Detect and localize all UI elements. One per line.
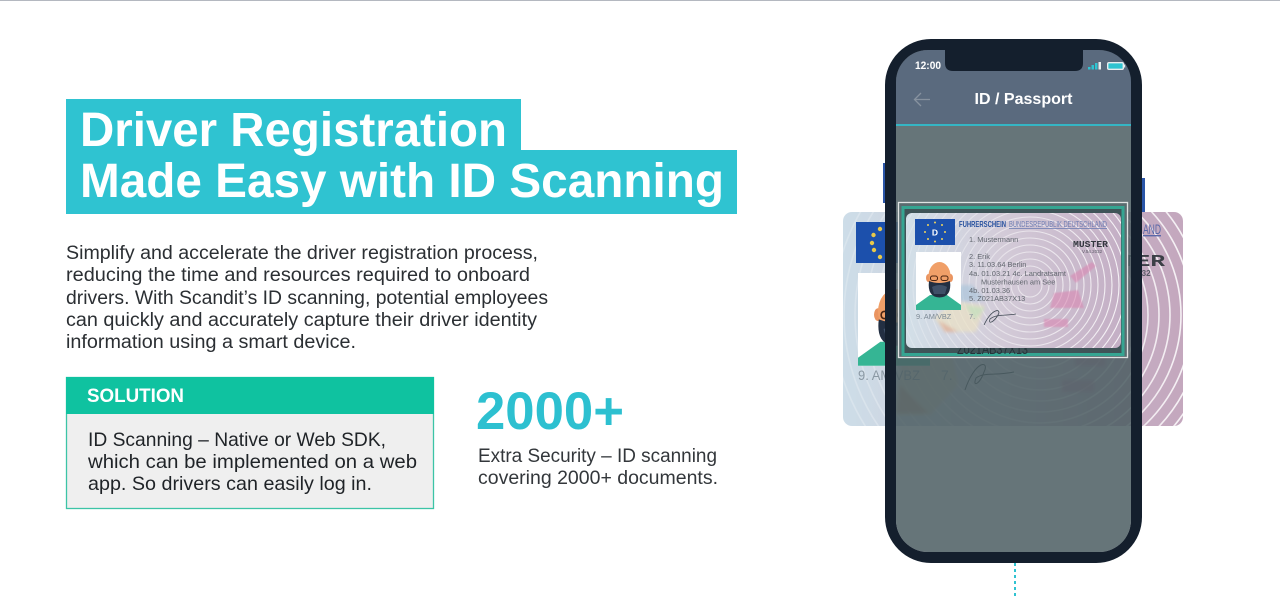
stat caption <box>478 446 718 489</box>
card heading <box>959 220 1107 229</box>
card fields: 7. <box>969 312 975 321</box>
back card licence category: 9. AM/VBZ <box>858 367 920 383</box>
stat caption: covering 2000+ documents. <box>478 468 718 489</box>
card heading: FUHRERSCHEIN <box>959 220 1006 229</box>
back card flag <box>856 222 916 263</box>
card fields: Musterhausen am See <box>981 278 1055 286</box>
icon: signal <box>1088 62 1101 70</box>
back card hologram <box>893 340 958 415</box>
card flag: D <box>932 228 938 238</box>
solution text: ID Scanning – Native or Web SDK, <box>88 429 386 451</box>
card flag <box>915 219 955 245</box>
solution text: app. So drivers can easily log in. <box>88 473 372 495</box>
card pink marks <box>1044 262 1096 327</box>
back card photo <box>858 273 930 366</box>
card fields: 5. Z021AB37X13 <box>969 294 1025 303</box>
guilloche pattern <box>906 213 1121 348</box>
intro paragraph: drivers. With Scandit’s ID scanning, potential employees <box>66 288 548 309</box>
front ID card <box>906 213 1121 348</box>
scan frame <box>898 202 1128 358</box>
solution text <box>87 429 417 495</box>
solution heading: SOLUTION <box>87 386 184 407</box>
stat: 2000+ <box>476 382 718 489</box>
notch <box>945 49 1083 71</box>
title banner: Driver Registration <box>80 104 507 157</box>
back card specimen stamp: MUSTER <box>1077 253 1166 272</box>
back card stamp date: .932 <box>1135 269 1151 278</box>
back ID card <box>843 212 1183 426</box>
icon: battery <box>1108 63 1125 69</box>
intro paragraph: can quickly and accurately capture their driver identity <box>66 310 538 331</box>
blue edges behind phone <box>883 163 1145 247</box>
phone body <box>885 39 1142 563</box>
screen title: ID / Passport <box>974 91 1073 108</box>
app header <box>896 50 1131 124</box>
solution header <box>66 377 434 414</box>
intro paragraph: reducing the time and resources required to onboard <box>66 265 530 286</box>
intro paragraph: information using a smart device. <box>66 332 356 353</box>
title banner <box>66 99 737 214</box>
icon: back arrow <box>914 93 930 106</box>
phone <box>885 39 1142 563</box>
back card pink marks <box>1062 356 1105 392</box>
top rule <box>0 0 1280 1</box>
panel: solution <box>66 377 434 508</box>
card fields: 1. Mustermann <box>969 235 1018 244</box>
header rule <box>896 124 1131 126</box>
dotted connector <box>1014 563 1016 599</box>
back card signature <box>965 365 1014 390</box>
card heading: BUNDESREPUBLIK DEUTSCHLAND <box>1009 220 1107 229</box>
screen overlay <box>896 50 1131 552</box>
card photo <box>916 252 961 310</box>
back card country text: AND <box>1143 221 1161 237</box>
hologram <box>934 285 985 332</box>
card fields: 2. Erik <box>969 252 990 261</box>
card fields: 4b. 01.03.36 <box>969 286 1010 295</box>
status time: 12:00 <box>915 60 941 72</box>
stat caption: Extra Security – ID scanning <box>478 446 717 467</box>
title banner: Made Easy with ID Scanning <box>80 155 724 208</box>
card fields: 3. 11.03.64 Berlin <box>969 260 1026 269</box>
card signature <box>984 311 1016 325</box>
solution text: which can be implemented on a web <box>87 451 417 473</box>
card fields: 4a. 01.03.21 4c. Landratsamt <box>969 269 1066 278</box>
card stamp: MUSTER <box>1073 239 1108 250</box>
back card field seven: 7. <box>941 367 953 383</box>
card stamp date: V.54.2032 <box>1082 249 1103 254</box>
intro paragraph: Simplify and accelerate the driver registration process, <box>66 243 538 264</box>
card fields: 9. AM/VBZ <box>916 312 952 321</box>
partially hidden back card number: Z021AB37X13 <box>957 341 1028 357</box>
intro paragraph <box>66 243 548 353</box>
stat: 2000+: 2000+ <box>476 382 624 441</box>
card fields <box>916 235 1066 321</box>
